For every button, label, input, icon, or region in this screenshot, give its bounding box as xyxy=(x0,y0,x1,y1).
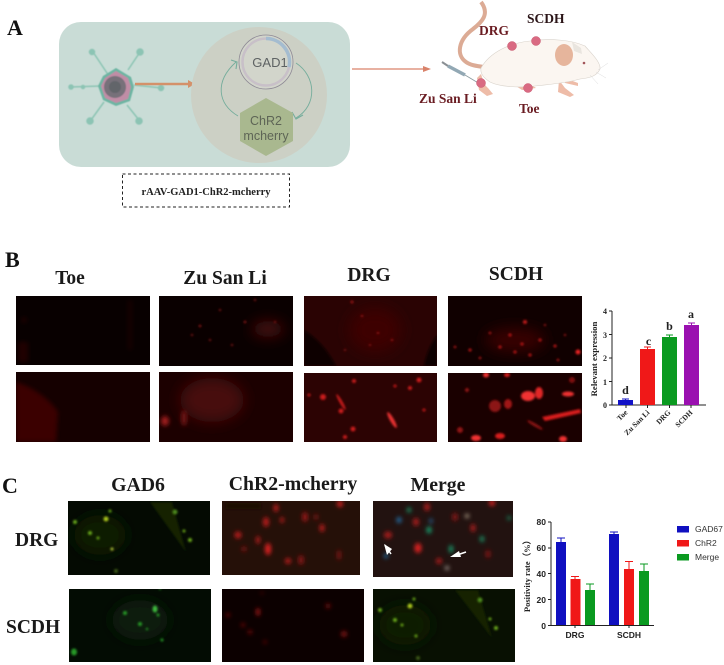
callout: construct name xyxy=(122,174,290,207)
micrograph: DRG bottom xyxy=(304,373,437,442)
x tick labels: DRG xyxy=(654,408,673,426)
panel: viral vector schematic xyxy=(59,22,350,167)
x tick labels: SCDH xyxy=(617,630,641,640)
micrograph: Toe bottom xyxy=(16,372,150,442)
panel label B: B xyxy=(5,247,20,272)
x tick labels: SCDH xyxy=(673,408,695,429)
icon: AAV virus particle xyxy=(69,49,164,124)
column headings B: Toe xyxy=(55,268,85,289)
column headings B: DRG xyxy=(347,265,391,286)
site labels xyxy=(419,11,565,116)
column headings B: SCDH xyxy=(489,264,543,285)
arrow: virus to plasmid xyxy=(135,80,195,88)
micrograph: Merge DRG xyxy=(373,501,513,577)
y axis title: Relevant expression xyxy=(589,321,599,396)
significance letters xyxy=(622,307,694,397)
panel label A: A xyxy=(7,15,23,40)
micrograph: DRG top xyxy=(304,296,437,366)
mouse ear xyxy=(555,44,573,66)
micrographs: panel C xyxy=(68,500,515,662)
significance letters: c xyxy=(646,334,652,348)
axes xyxy=(548,522,654,628)
error bars xyxy=(557,532,648,590)
site labels: Toe xyxy=(519,101,540,116)
legend: Merge xyxy=(695,552,719,562)
site labels: Zu San Li xyxy=(419,91,477,106)
micrograph: GAD6 DRG xyxy=(68,501,210,575)
x tick labels: Toe xyxy=(615,408,630,422)
y tick labels xyxy=(537,517,546,631)
axes xyxy=(609,311,706,408)
x tick labels: DRG xyxy=(566,630,585,640)
arrow: construct to mouse xyxy=(352,66,431,72)
icon: ChR2 mcherry hexagon: ChR2 xyxy=(250,114,282,128)
arrows: colocalised cells xyxy=(384,544,466,557)
bar chart: positivity rate xyxy=(522,517,654,640)
micrograph: ChR2 SCDH xyxy=(222,589,364,662)
column headings B xyxy=(55,264,543,289)
micrograph: Zu San Li top xyxy=(159,296,293,366)
icon: syringe xyxy=(442,62,480,84)
micrograph: SCDH bottom xyxy=(448,373,582,442)
panel label C: C xyxy=(2,473,18,498)
legend: GAD67 xyxy=(695,524,723,534)
micrograph: ChR2 DRG xyxy=(222,501,360,575)
row headings C: DRG xyxy=(15,530,58,551)
significance letters: b xyxy=(666,319,673,333)
column headings C: Merge xyxy=(411,474,466,496)
y tick labels: 4 xyxy=(603,307,607,316)
mouse eye xyxy=(583,62,585,64)
micrograph: GAD6 SCDH xyxy=(69,589,211,662)
significance letters: d xyxy=(622,383,629,397)
micrograph: SCDH top xyxy=(448,296,582,366)
column headings C: ChR2-mcherry xyxy=(229,473,357,495)
y tick labels: 40 xyxy=(537,569,546,579)
column headings C: GAD6 xyxy=(111,474,165,496)
arrows: cycle between GAD1 and ChR2 xyxy=(221,60,312,119)
x tick labels xyxy=(566,630,641,640)
x tick labels: Zu San Li xyxy=(622,408,651,437)
bar chart: relevant expression xyxy=(589,307,706,437)
icon: GAD1 plasmid ring xyxy=(239,35,293,89)
bars xyxy=(556,542,566,625)
micrograph: Merge SCDH xyxy=(373,589,515,662)
bars xyxy=(618,400,633,405)
y tick labels: 0 xyxy=(603,401,607,410)
y axis title: Positivity rate（%） xyxy=(522,536,532,612)
significance letters: a xyxy=(688,307,694,321)
y tick labels: 60 xyxy=(537,543,546,553)
y tick labels: 0 xyxy=(541,621,546,631)
y tick labels xyxy=(603,307,607,410)
icon: ChR2 mcherry hexagon xyxy=(240,98,293,156)
circle: construct background xyxy=(191,27,327,163)
error bars xyxy=(622,399,629,400)
column headings B: Zu San Li xyxy=(183,268,267,289)
mouse legs xyxy=(477,74,578,97)
mouse tail xyxy=(460,2,485,67)
illustration: mouse with injection sites xyxy=(419,2,608,116)
row headings C: SCDH xyxy=(6,617,60,638)
row headings C xyxy=(6,530,60,638)
y tick labels: 1 xyxy=(603,378,607,387)
micrograph: Zu San Li bottom xyxy=(159,372,293,442)
legend xyxy=(677,524,723,562)
site labels: DRG xyxy=(479,23,509,38)
y tick labels: 2 xyxy=(603,354,607,363)
callout: construct name: rAAV-GAD1-ChR2-mcherry xyxy=(141,187,271,198)
y tick labels: 3 xyxy=(603,331,607,340)
mouse whiskers xyxy=(590,63,608,84)
icon: GAD1 plasmid ring: GAD1 xyxy=(252,55,288,70)
micrographs: panel B xyxy=(16,296,582,442)
icon: ChR2 mcherry hexagon: mcherry xyxy=(243,129,289,143)
injection site markers xyxy=(476,36,540,92)
site labels: SCDH xyxy=(527,11,565,26)
legend: ChR2 xyxy=(695,538,717,548)
mouse body xyxy=(481,40,600,87)
x tick labels xyxy=(615,408,695,437)
column headings C xyxy=(111,473,466,496)
micrograph: Toe top xyxy=(16,296,150,365)
y tick labels: 80 xyxy=(537,517,546,527)
y tick labels: 20 xyxy=(537,595,546,605)
